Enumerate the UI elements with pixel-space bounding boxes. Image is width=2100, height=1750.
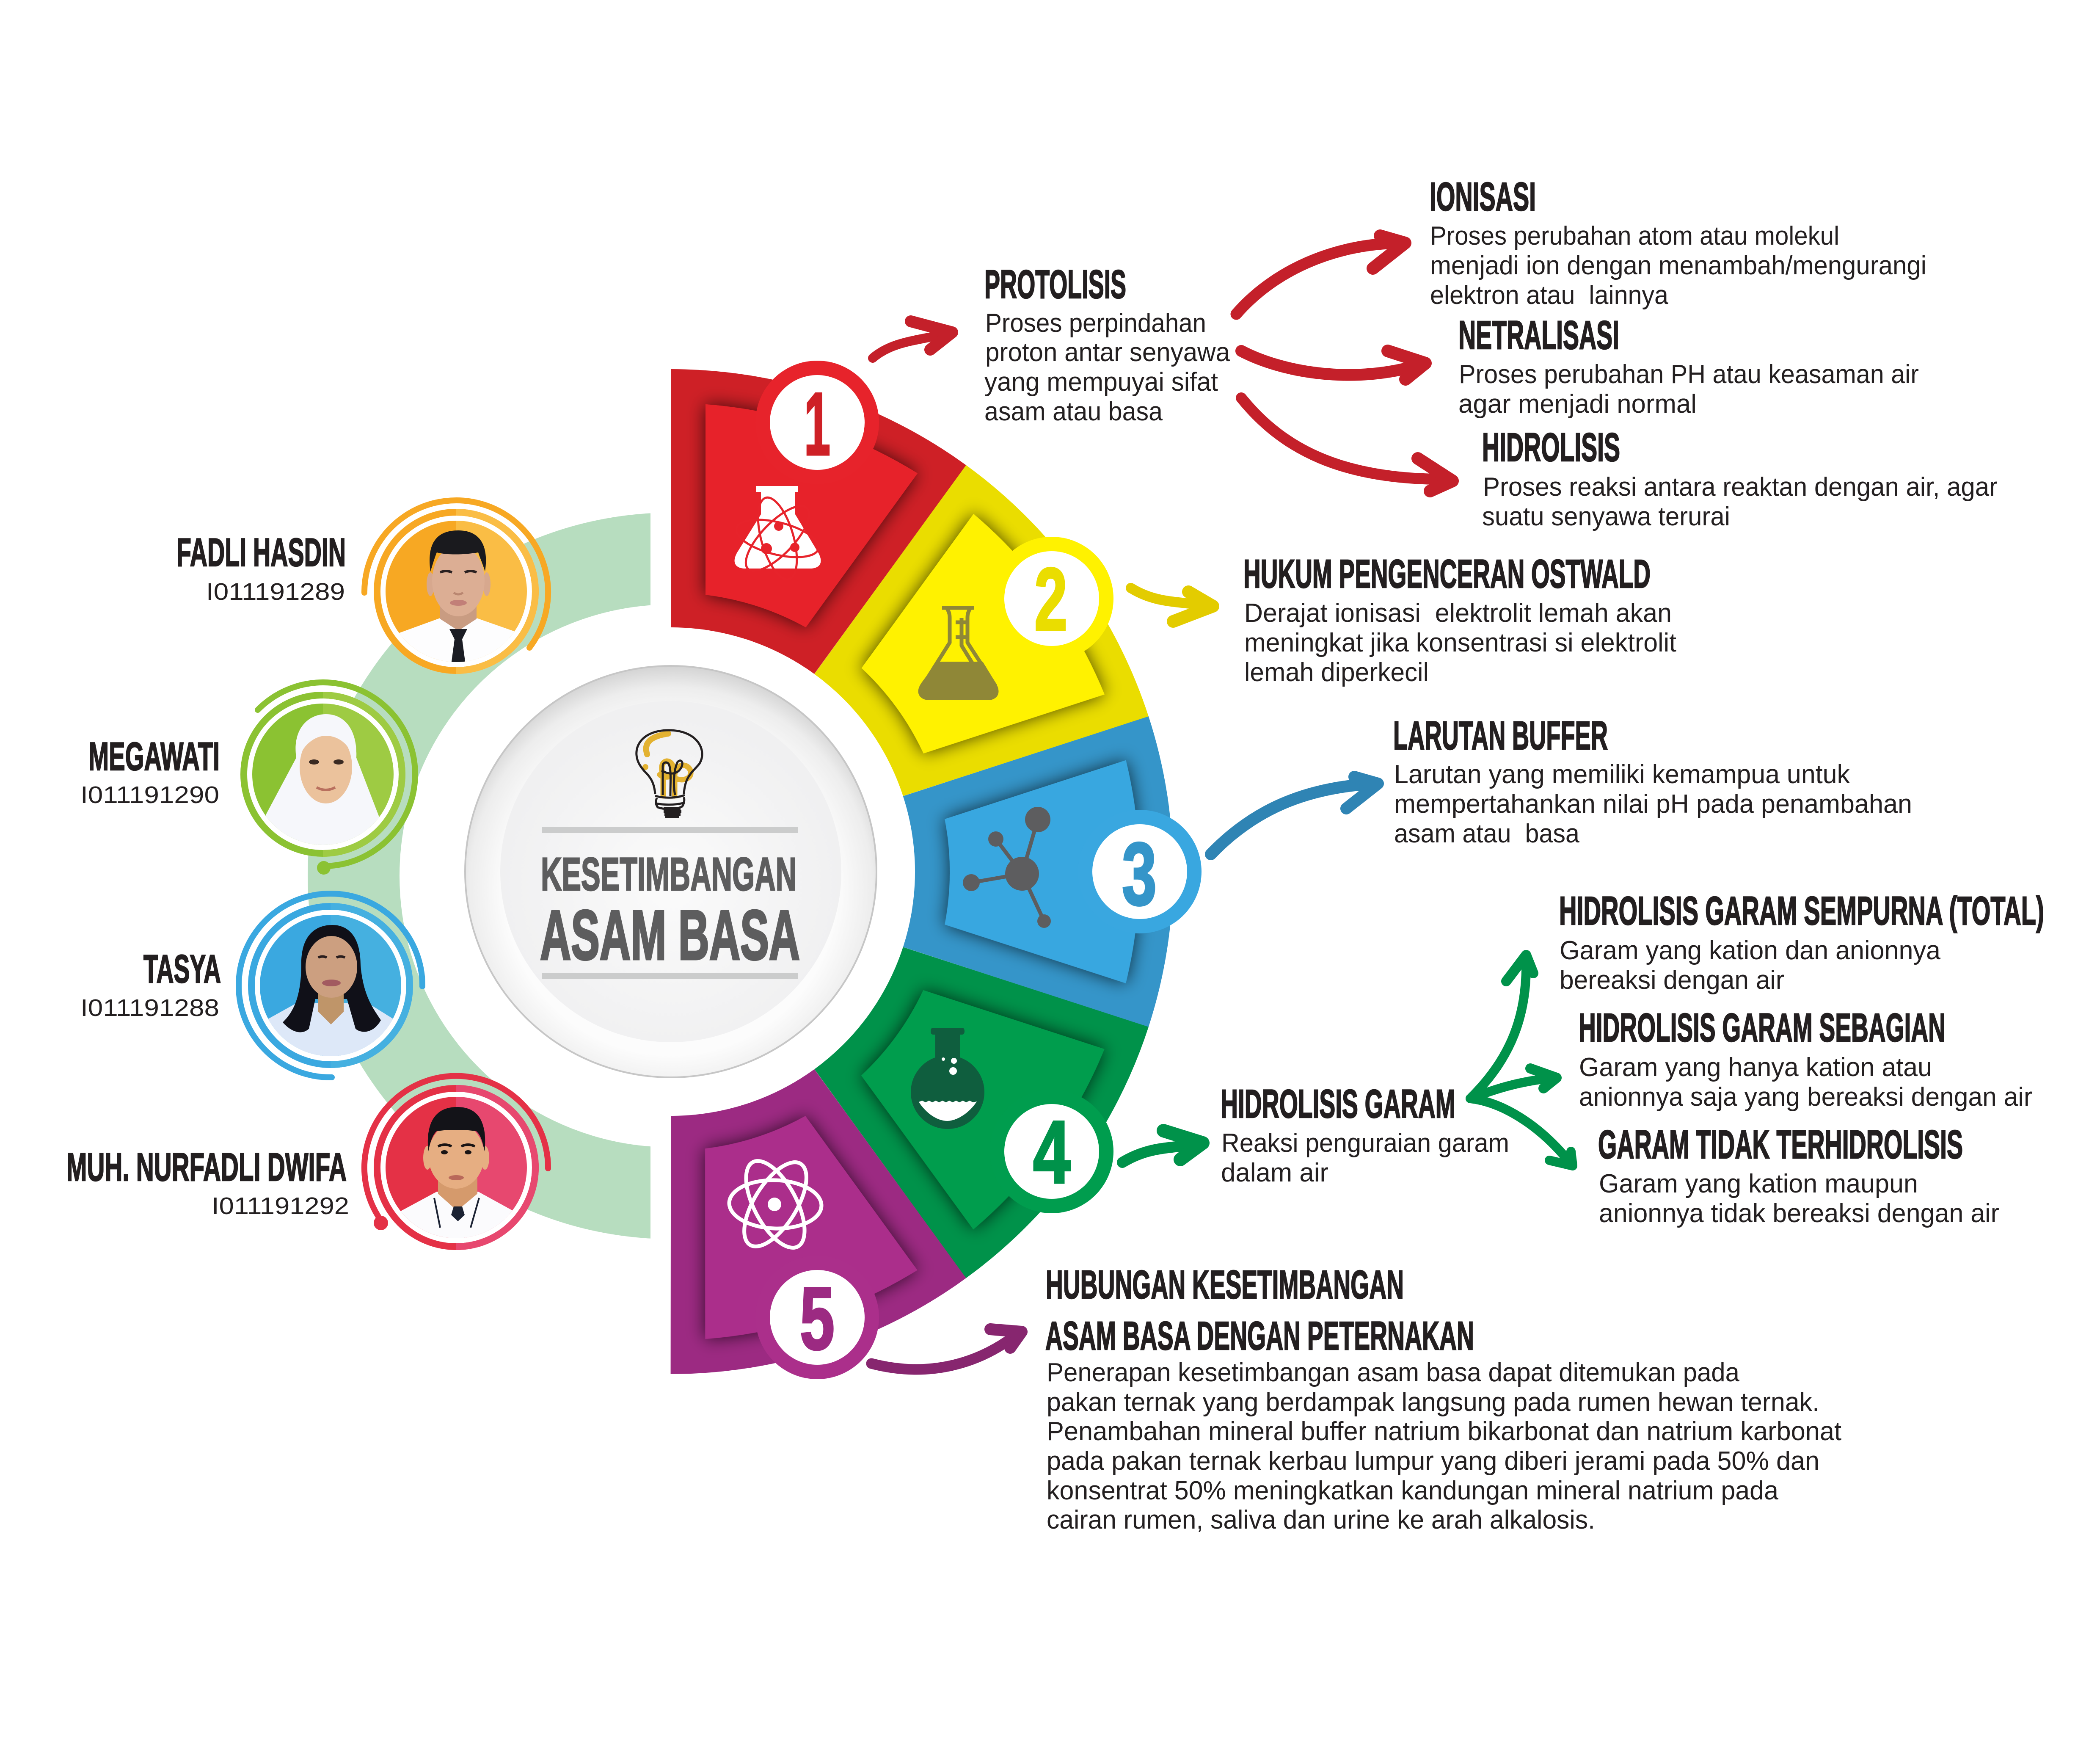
text block: garam tidak terhidrolisis: Garam yang kation maupun bbox=[1599, 1169, 1918, 1198]
panel 5 bbox=[615, 1090, 918, 1395]
number badge 4: 4 bbox=[1033, 1102, 1070, 1202]
number badge 3 bbox=[1078, 810, 1202, 933]
text block: hubungan kesetimbangan: pakan ternak yang berdampak langsung pada rumen hewan ternak. bbox=[1047, 1388, 1819, 1417]
icon: atom bbox=[728, 1152, 822, 1256]
background green ring bbox=[308, 513, 650, 1239]
text block: protolisis: proton antar senyawa bbox=[985, 338, 1230, 367]
text block: protolisis bbox=[984, 262, 1230, 426]
icon: flask with atom bbox=[733, 486, 822, 584]
text block: hidrolisis: HIDROLISIS bbox=[1482, 425, 1620, 470]
title: ASAM BASA bbox=[540, 896, 800, 974]
number badge 5: 5 bbox=[800, 1269, 835, 1368]
text block: larutan buffer: Larutan yang memiliki kemampua untuk bbox=[1394, 760, 1850, 789]
text block: netralisasi bbox=[1458, 313, 1919, 419]
segmented half ring bbox=[548, 369, 1240, 1452]
segment 2 yellow bbox=[787, 465, 1205, 885]
number badge 1: 1 bbox=[804, 374, 830, 474]
label: Tasya: I011191288 bbox=[80, 994, 219, 1021]
icon: round flask bbox=[911, 1028, 984, 1129]
text block: protolisis: PROTOLISIS bbox=[984, 262, 1126, 307]
text block: hubungan kesetimbangan: ASAM BASA DENGAN PETERNAKAN bbox=[1045, 1314, 1474, 1358]
text block: ionisasi: menjadi ion dengan menambah/mengurangi bbox=[1430, 251, 1926, 280]
portrait: Fadli Hasdin bbox=[364, 500, 548, 677]
text block: hubungan kesetimbangan: cairan rumen, saliva dan urine ke arah alkalosis. bbox=[1047, 1505, 1595, 1535]
segment 4 green bbox=[767, 933, 1149, 1308]
text block: ionisasi bbox=[1430, 174, 1926, 310]
panel 4 bbox=[827, 980, 1105, 1251]
arrow: hidrolisis garam fan bbox=[1470, 955, 1573, 1166]
text block: hubungan kesetimbangan bbox=[1045, 1262, 1841, 1535]
arrow: to buffer bbox=[1211, 777, 1378, 854]
text block: hidrolisis garam bbox=[1221, 1082, 1509, 1187]
text block: hidrolisis: Proses reaksi antara reaktan dengan air, agar bbox=[1483, 472, 1998, 502]
text block: hidrolisis garam sebagian: anionnya saja yang bereaksi dengan air bbox=[1579, 1082, 2032, 1112]
arrow: to ostwald bbox=[1131, 588, 1213, 621]
panel 2 bbox=[842, 514, 1145, 819]
text block: ionisasi: elektron atau lainnya bbox=[1430, 281, 1668, 310]
icon: molecule bbox=[963, 807, 1051, 928]
text block: hidrolisis garam: HIDROLISIS GARAM bbox=[1221, 1082, 1455, 1126]
text block: garam tidak terhidrolisis: anionnya tidak bereaksi dengan air bbox=[1599, 1199, 1999, 1228]
label: Megawati bbox=[80, 734, 220, 809]
title: KESETIMBANGAN bbox=[541, 848, 796, 900]
text block: hidrolisis garam sebagian bbox=[1579, 1005, 2032, 1112]
central disc bbox=[465, 666, 876, 1077]
label: Megawati: I011191290 bbox=[80, 781, 219, 809]
label: Fadli Hasdin bbox=[176, 530, 346, 605]
text block: protolisis: asam atau basa bbox=[984, 397, 1163, 426]
text block: ionisasi: IONISASI bbox=[1430, 174, 1536, 219]
text block: hubungan kesetimbangan: Penambahan mineral buffer natrium bikarbonat dan natrium karbonat bbox=[1047, 1417, 1841, 1446]
text block: hukum pengenceran ostwald: HUKUM PENGENCERAN OSTWALD bbox=[1243, 552, 1651, 596]
number badge 3: 3 bbox=[1122, 824, 1157, 924]
text block: netralisasi: agar menjadi normal bbox=[1458, 389, 1697, 419]
label: Muh. Nurfadli Dwifa: MUH. NURFADLI DWIFA bbox=[66, 1145, 347, 1189]
arrow: to hidrolisis bbox=[1241, 398, 1452, 491]
text block: hidrolisis garam sempurna bbox=[1559, 889, 2044, 995]
text block: larutan buffer: mempertahankan nilai pH pada penambahan bbox=[1394, 789, 1912, 819]
segment 3 blue bbox=[859, 716, 1240, 1092]
portrait: Megawati bbox=[240, 682, 415, 875]
number badge 2: 2 bbox=[1034, 549, 1067, 649]
label: Fadli Hasdin: FADLI HASDIN bbox=[176, 530, 346, 574]
text block: hukum pengenceran ostwald: meningkat jika konsentrasi si elektrolit bbox=[1244, 628, 1676, 657]
label: Muh. Nurfadli Dwifa bbox=[66, 1145, 349, 1220]
arrow: to hubungan bbox=[871, 1329, 1022, 1369]
text block: hidrolisis garam: Reaksi penguraian garam bbox=[1221, 1129, 1509, 1158]
text block: protolisis: Proses perpindahan bbox=[985, 309, 1206, 338]
number badge 4 bbox=[990, 1090, 1113, 1213]
arrow: to hidrolisis garam bbox=[1122, 1131, 1203, 1162]
text block: larutan buffer: LARUTAN BUFFER bbox=[1393, 713, 1608, 758]
label: Tasya bbox=[80, 947, 221, 1021]
text block: hidrolisis garam sempurna: bereaksi dengan air bbox=[1560, 966, 1784, 995]
text block: netralisasi: Proses perubahan PH atau keasaman air bbox=[1459, 360, 1919, 389]
text block: hubungan kesetimbangan: Penerapan kesetimbangan asam basa dapat ditemukan pada bbox=[1047, 1358, 1740, 1387]
number badge 1 bbox=[755, 361, 879, 484]
segment 1 red bbox=[671, 369, 966, 674]
text block: hubungan kesetimbangan: pada pakan ternak kerbau lumpur yang diberi jerami pada 50% dan bbox=[1047, 1446, 1819, 1476]
label: Megawati: MEGAWATI bbox=[88, 734, 220, 778]
text block: hidrolisis bbox=[1482, 425, 1998, 531]
text block: netralisasi: NETRALISASI bbox=[1458, 313, 1619, 358]
number badge 2 bbox=[990, 537, 1113, 660]
text block: ionisasi: Proses perubahan atom atau molekul bbox=[1430, 221, 1839, 251]
icon: light bulb bbox=[637, 730, 702, 817]
text block: larutan buffer bbox=[1393, 713, 1912, 848]
text block: hukum pengenceran ostwald bbox=[1243, 552, 1676, 687]
text block: larutan buffer: asam atau basa bbox=[1394, 819, 1579, 848]
number badge 5 bbox=[755, 1256, 879, 1379]
panel 1 bbox=[706, 404, 918, 627]
text block: hubungan kesetimbangan: HUBUNGAN KESETIMBANGAN bbox=[1046, 1262, 1404, 1307]
text block: hukum pengenceran ostwald: lemah diperkecil bbox=[1244, 658, 1429, 687]
text block: hidrolisis garam sebagian: Garam yang hanya kation atau bbox=[1579, 1053, 1932, 1082]
label: Tasya: TASYA bbox=[143, 947, 221, 991]
label: Fadli Hasdin: I011191289 bbox=[206, 578, 345, 605]
title bbox=[540, 827, 800, 979]
text block: hidrolisis: suatu senyawa terurai bbox=[1482, 502, 1730, 531]
icon: conical flask bbox=[918, 608, 998, 700]
text block: hidrolisis garam sempurna: Garam yang kation dan anionnya bbox=[1560, 936, 1941, 965]
portrait: Tasya bbox=[239, 894, 422, 1077]
arrow: to protolisis bbox=[873, 321, 952, 358]
label: Muh. Nurfadli Dwifa: I011191292 bbox=[212, 1192, 349, 1220]
text block: protolisis: yang mempuyai sifat bbox=[984, 367, 1218, 397]
text block: hukum pengenceran ostwald: Derajat ionisasi elektrolit lemah akan bbox=[1244, 599, 1672, 628]
arrow: to ionisasi bbox=[1236, 236, 1405, 314]
segment 5 purple bbox=[548, 1032, 966, 1452]
text block: garam tidak terhidrolisis bbox=[1598, 1122, 1999, 1228]
panel 3 bbox=[914, 760, 1191, 1031]
text block: hubungan kesetimbangan: konsentrat 50% meningkatkan kandungan mineral natrium pada bbox=[1047, 1476, 1778, 1505]
arrow: to netralisasi bbox=[1241, 351, 1425, 379]
text block: hidrolisis garam: dalam air bbox=[1221, 1158, 1328, 1187]
portrait: Muh. Nurfadli Dwifa bbox=[364, 1076, 548, 1250]
